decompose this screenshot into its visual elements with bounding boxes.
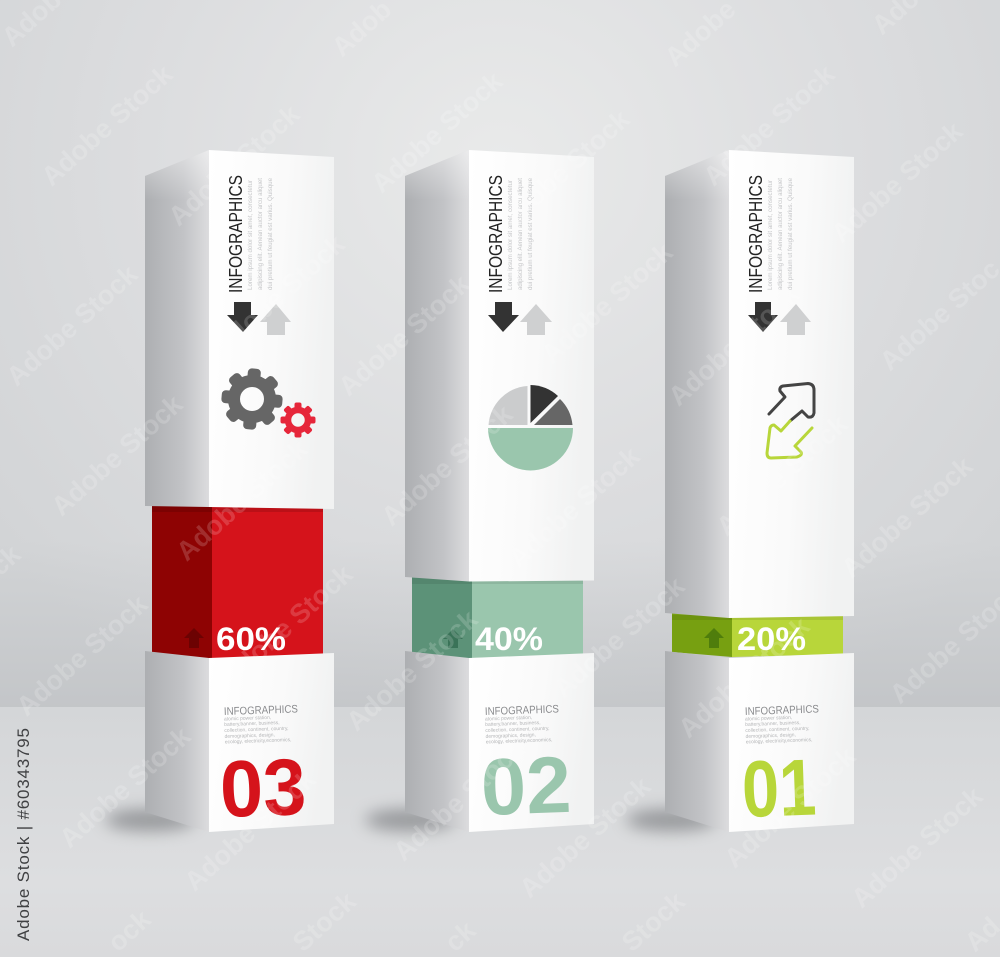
description text [485, 714, 553, 745]
vertical lorem text: dui pretium ut feugiat est varius. Quisque [267, 177, 274, 290]
icon: down arrow [488, 302, 519, 332]
tall top box [665, 150, 854, 618]
icon: small up arrow [443, 629, 463, 648]
watermark overlay: Adobe Stock [341, 603, 484, 737]
watermark overlay: Adobe Stock [179, 763, 322, 897]
vertical heading: INFOGRAPHICS [226, 175, 246, 293]
number 01: 01 [740, 742, 818, 834]
icon: up arrow [780, 304, 811, 335]
watermark overlay: Adobe Stock [711, 408, 854, 542]
column 01 [665, 150, 854, 834]
vertical lorem text: Lorem ipsum dolor sit amet, consectetur [507, 180, 514, 290]
icon: small red gear [280, 402, 316, 438]
watermark overlay: Adobe Stock [493, 103, 636, 237]
watermark overlay: ck [439, 914, 482, 957]
watermark overlay: Adobe Stock [208, 228, 351, 362]
watermark overlay: Adobe Stock [333, 268, 476, 402]
icon: up arrow [260, 304, 291, 335]
wall shading near floor [0, 540, 1000, 708]
watermark overlay: Adobe Stock [171, 433, 314, 567]
floor shadows [105, 809, 716, 831]
background wall [0, 0, 1000, 708]
description text: ecology, electricity,economics, [225, 737, 292, 745]
vertical lorem text [507, 177, 534, 290]
watermark overlay: Adobe Stock [388, 733, 531, 867]
icon: up arrow [520, 304, 552, 335]
green 40% block [412, 570, 583, 660]
icon: small up arrow [184, 628, 204, 648]
sub heading: INFOGRAPHICS [745, 703, 819, 718]
icon: small up arrow [704, 628, 724, 648]
description text: atomic power station, [745, 715, 792, 722]
sub heading: INFOGRAPHICS [485, 703, 559, 718]
description text: collection, continent, country, [485, 726, 550, 734]
description text: ecology, electricity,economics, [486, 737, 553, 745]
vertical lorem text: Lorem ipsum dolor sit amet, consectetur [247, 180, 254, 290]
percentage 40%: 40% [475, 621, 543, 657]
bottom box [145, 651, 334, 834]
vertical lorem text [767, 177, 794, 290]
bottom box [405, 651, 594, 832]
vertical lorem text: adipiscing elit. Aenean auctor arcu aliquet [777, 178, 784, 290]
vertical heading: INFOGRAPHICS [746, 175, 766, 293]
percentage 60%: 60% [216, 621, 286, 657]
icon: down arrow [748, 302, 778, 332]
description text: battery,banner, business, [224, 720, 280, 728]
icon: large gear [221, 368, 283, 430]
background floor [0, 707, 1000, 957]
bottom box [665, 651, 854, 834]
vertical lorem text [247, 177, 274, 290]
description text [745, 714, 813, 745]
description text: ecology, electricity,economics, [746, 737, 813, 745]
watermark overlay: Stock [616, 885, 691, 957]
vertical lorem text: dui pretium ut feugiat est varius. Quisque [527, 177, 534, 290]
description text: collection, continent, country, [224, 726, 289, 734]
stock id caption: Adobe Stock | #60343795 [14, 728, 33, 941]
watermark overlay: Stock [287, 885, 362, 957]
watermark overlay: ock [102, 903, 157, 957]
icon: pie chart [488, 385, 573, 470]
description text: collection, continent, country, [745, 726, 810, 734]
column 03 [145, 150, 334, 834]
red 60% block [152, 500, 323, 660]
watermark overlay: Adobe Stock [36, 58, 179, 192]
watermark overlay: Adobe Stock [826, 115, 969, 249]
watermark overlay: Adobe Stock [673, 610, 816, 744]
vertical lorem text: Lorem ipsum dolor sit amet, consectetur [767, 180, 774, 290]
percentage 20%: 20% [737, 621, 806, 657]
description text: demographics, design, [485, 732, 536, 740]
vertical lorem text: dui pretium ut feugiat est varius. Quisque [787, 177, 794, 290]
watermark overlay: Adobe Stock [548, 570, 691, 704]
watermark overlay: Adobe Stock [216, 558, 359, 692]
lime 20% block [672, 605, 843, 657]
icon: exchange arrows [767, 384, 814, 458]
watermark overlay: Adobe Stock [663, 278, 806, 412]
watermark overlay: Adobe Stock [163, 98, 306, 232]
vertical lorem text: adipiscing elit. Aenean auctor arcu aliquet [517, 178, 524, 290]
tall top box [405, 150, 594, 582]
watermark overlay: Adobe Stock [846, 780, 989, 914]
description text: atomic power station, [224, 715, 271, 722]
description text [224, 714, 292, 745]
watermark overlay: Adobe Stock [1, 258, 144, 392]
watermark overlay: Adobe Stock [514, 770, 657, 904]
column 02 [405, 150, 594, 832]
watermark overlay: Adobe Stock [536, 236, 679, 370]
number 03: 03 [218, 742, 308, 834]
description text: demographics, design, [224, 732, 275, 740]
watermark overlay: Adobe Stock [376, 398, 519, 532]
watermark overlay: Adobe Stock [54, 720, 197, 854]
description text: battery,banner, business, [745, 720, 801, 728]
vertical lorem text: adipiscing elit. Aenean auctor arcu aliquet [257, 178, 264, 290]
watermark overlay: Adobe Stock [46, 388, 189, 522]
watermark overlay: Adobe Stock [503, 440, 646, 574]
description text: demographics, design, [745, 732, 796, 740]
icon: down arrow [227, 302, 258, 332]
description text: battery,banner, business, [485, 720, 541, 728]
number 02: 02 [479, 740, 573, 832]
watermark overlay: Adobe Stock [366, 65, 509, 199]
watermark overlay: Adobe Stock [836, 450, 979, 584]
sub heading: INFOGRAPHICS [224, 703, 298, 718]
watermark overlay: Adobe Stock [719, 740, 862, 874]
tall top box [145, 150, 334, 509]
description text: atomic power station, [485, 715, 532, 722]
vertical heading: INFOGRAPHICS [486, 175, 506, 293]
watermark overlay: Adobe Stock [698, 58, 841, 192]
watermark overlay: Adobe Stock [11, 588, 154, 722]
